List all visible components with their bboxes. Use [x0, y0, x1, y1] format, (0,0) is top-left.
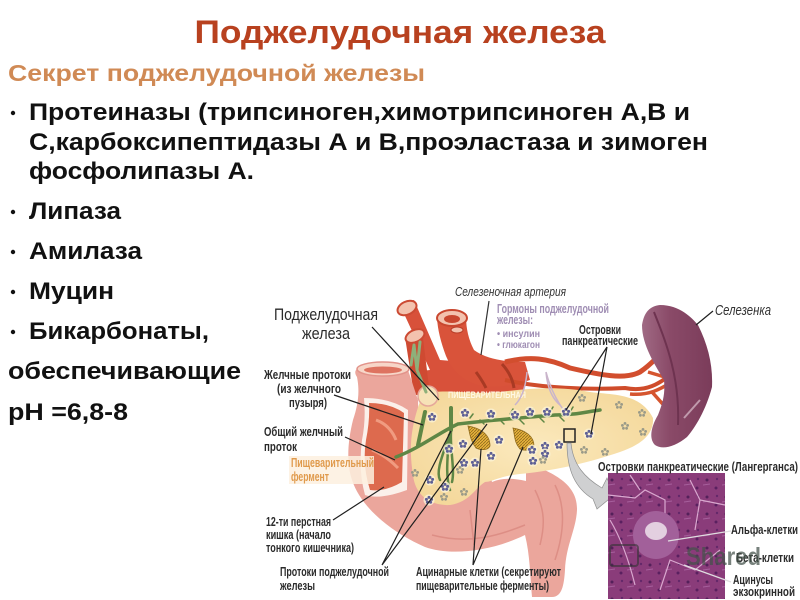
labels: тонкого кишечника)	[266, 540, 354, 555]
callout arrow to micrograph	[567, 443, 614, 509]
islets	[411, 394, 647, 506]
text block: secretion list	[8, 99, 708, 426]
text block: secretion list: Амилаза	[29, 238, 143, 265]
labels: Гормоны поджелудочной	[497, 301, 609, 316]
labels: пузыря)	[289, 395, 327, 410]
micrograph: islets of Langerhans	[608, 473, 725, 599]
diagram: pancreas anatomy	[263, 284, 798, 599]
text block: secretion list: Муцин	[29, 278, 114, 305]
labels: Общий желчный	[264, 424, 343, 439]
labels: проток	[264, 439, 297, 454]
labels: Селезеночная артерия	[455, 284, 566, 299]
pancreas body	[411, 388, 653, 505]
leader lines	[333, 301, 713, 565]
labels: Протоки поджелудочной	[280, 564, 389, 579]
labels: железы:	[496, 312, 533, 327]
text block: secretion list: рН =6,8-8	[8, 399, 128, 426]
labels: железы	[279, 578, 315, 593]
text block: secretion list: С,карбоксипептидазы А и В,проэластаза и зимоген	[29, 129, 708, 156]
labels: • инсулин	[497, 329, 540, 340]
text block: secretion list: Бикарбонаты,	[29, 318, 209, 345]
labels: Ацинусы	[733, 572, 773, 587]
labels: Островки	[579, 322, 621, 337]
labels: Селезенка	[715, 302, 771, 319]
watermark	[610, 543, 761, 571]
pancreatic ducts	[396, 342, 600, 490]
labels: Пищеварительный	[291, 455, 374, 470]
title: Поджелудочная железа	[194, 14, 606, 50]
faint organ text: ПИЩЕВАРИТЕЛЬНАЯ	[448, 390, 526, 400]
spleen	[642, 305, 712, 447]
text block: secretion list: Протеиназы (трипсиноген,химотрипсиноген А,В и	[29, 99, 690, 126]
watermark: Shared	[686, 543, 761, 571]
labels: (из желчного	[277, 381, 341, 396]
labels	[263, 284, 798, 599]
labels: Поджелудочная	[274, 305, 378, 324]
text block: secretion list: Липаза	[29, 198, 122, 225]
labels: Ацинарные клетки (секретируют	[416, 564, 561, 579]
labels: фермент	[291, 469, 329, 484]
islet highlight box	[564, 429, 575, 442]
hormone vessels	[515, 372, 565, 412]
text block: secretion list: фосфолипазы А.	[29, 158, 254, 185]
acinar clusters	[468, 426, 534, 450]
labels: • глюкагон	[497, 340, 540, 351]
labels: кишка (начало	[266, 527, 331, 542]
labels: пищеварительные ферменты)	[416, 578, 549, 593]
text block: secretion list: обеспечивающие	[8, 358, 241, 385]
labels: панкреатические	[562, 333, 638, 348]
labels: Желчные протоки	[263, 367, 351, 382]
arteries	[395, 298, 676, 410]
labels: железа	[302, 324, 350, 343]
labels: 12-ти перстная	[266, 514, 331, 529]
duodenum	[348, 362, 577, 597]
subheading: pancreatic secretion: Секрет поджелудочной железы	[8, 60, 425, 86]
